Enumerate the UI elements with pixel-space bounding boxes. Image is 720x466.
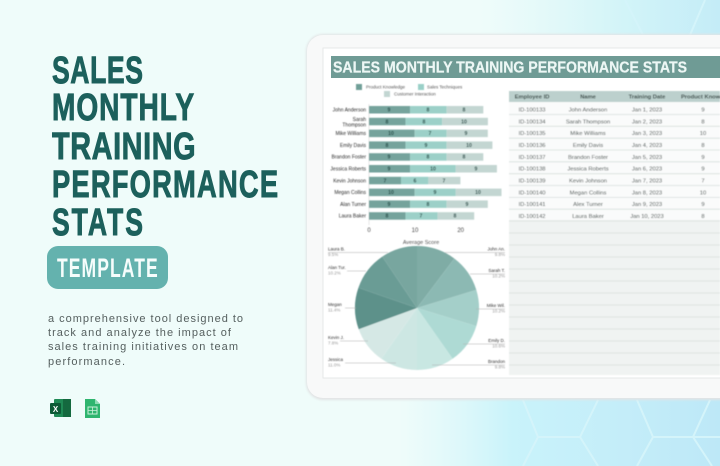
pie labels: Megan	[328, 302, 342, 307]
pie slices	[355, 246, 479, 370]
pie chart	[328, 240, 505, 370]
table rows: ID-100141	[518, 202, 546, 208]
table rows: ID-100142	[518, 214, 546, 220]
title: SALES	[52, 48, 143, 91]
bars: 8	[386, 214, 389, 220]
bars: 10	[388, 190, 394, 196]
pie labels: 9.8%	[495, 364, 505, 370]
bar names: Laura Baker	[339, 214, 366, 220]
bars: 7	[443, 178, 446, 184]
table rows: 9	[701, 155, 705, 161]
bars: 8	[423, 119, 426, 125]
table rows: Jan 7, 2023	[632, 178, 662, 184]
pie title: Average Score	[403, 240, 439, 246]
description	[48, 313, 243, 368]
tablet frame	[306, 34, 720, 400]
pie labels: 9.5%	[328, 252, 338, 257]
pie labels: Brandon	[488, 359, 505, 364]
bar names: Alan Turner	[340, 202, 366, 208]
table rows: ID-100136	[518, 143, 546, 149]
description: sales training initiatives on team	[48, 341, 238, 353]
table rows: Mike Williams	[570, 131, 606, 137]
bars: 7	[384, 178, 387, 184]
bar names: Mike Williams	[335, 131, 366, 137]
table rows: 9	[701, 108, 705, 114]
table rows: Jan 9, 2023	[632, 202, 662, 208]
bar names: Sarah	[353, 117, 366, 123]
table rows: Jan 4, 2023	[632, 143, 662, 149]
bars: 8	[463, 155, 466, 161]
bars: 9	[425, 143, 428, 149]
table rows: Alex Turner	[573, 202, 603, 208]
template badge	[47, 246, 168, 289]
bars: 10	[430, 166, 436, 172]
bar names: Jessica Roberts	[330, 166, 366, 172]
chart legend	[356, 84, 463, 97]
chart legend: Sales Techniques	[427, 84, 463, 90]
bars: 7	[429, 131, 432, 137]
table rows	[509, 102, 720, 365]
title	[52, 48, 278, 243]
pie labels: Emily D.	[488, 338, 505, 343]
bars: 9	[388, 166, 391, 172]
table rows: 8	[701, 119, 705, 125]
table rows: Jan 10, 2023	[630, 214, 664, 220]
table rows: 10	[700, 190, 706, 196]
title: TRAINING	[52, 125, 196, 168]
description: track and analyze the impact of	[48, 327, 232, 339]
pie labels: 7.8%	[328, 340, 338, 346]
bar names: Thompson	[342, 122, 366, 128]
icon: excel: X	[53, 405, 59, 414]
table rows: Emily Davis	[573, 143, 603, 149]
bar names: Kevin Johnson	[333, 178, 366, 184]
description: performance.	[48, 356, 125, 368]
pie labels: 11.4%	[328, 308, 340, 312]
pie labels: John An.	[487, 246, 505, 252]
table rows: Jan 5, 2023	[632, 155, 662, 161]
bars: 8	[463, 108, 466, 114]
bars: 10	[475, 190, 481, 196]
table rows: 9	[701, 167, 705, 173]
table rows: Jan 1, 2023	[632, 108, 662, 114]
table rows: 8	[701, 143, 705, 149]
table rows: ID-100134	[518, 119, 546, 125]
title: PERFORMANCE	[52, 164, 278, 206]
table header: Employee ID	[515, 94, 549, 100]
pie labels: Laura B.	[328, 246, 345, 252]
bar names: Megan Collins	[334, 190, 366, 196]
table rows: Laura Baker	[572, 214, 604, 220]
bar names: John Anderson	[333, 108, 366, 114]
bar names: Emily Davis	[340, 143, 366, 149]
pie labels: 10.2%	[492, 274, 505, 278]
table rows: ID-100135	[518, 131, 546, 137]
table rows: ID-100133	[518, 108, 546, 114]
bar names	[330, 108, 366, 220]
table rows: Jan 2, 2023	[632, 119, 662, 125]
template badge: TEMPLATE	[57, 252, 158, 283]
table rows: 9	[701, 202, 705, 208]
pie labels: Alan Tur.	[328, 265, 346, 270]
table rows: Megan Collins	[570, 190, 606, 196]
table rows: Jan 8, 2023	[632, 190, 662, 196]
icon: excel	[50, 399, 71, 417]
table rows: Jan 3, 2023	[632, 131, 662, 137]
axis: 20	[457, 228, 465, 234]
bars: 10	[466, 143, 472, 149]
pie labels: Jessica	[328, 357, 344, 362]
bars: 7	[420, 214, 423, 220]
pie labels	[328, 246, 505, 370]
bars: 10	[388, 131, 394, 137]
table header: Training Date	[629, 94, 666, 100]
pie labels: 9.8%	[495, 252, 505, 257]
bars: 8	[386, 143, 389, 149]
table rows: Brandon Foster	[568, 155, 608, 161]
bars: 9	[475, 166, 478, 172]
bars: 9	[466, 202, 469, 208]
bars: 8	[427, 155, 430, 161]
bars: 8	[454, 214, 457, 220]
table rows: 8	[701, 214, 705, 220]
table rows: ID-100138	[518, 167, 546, 173]
chart legend: Customer Interaction	[394, 92, 436, 96]
pie labels: 10.2%	[492, 308, 505, 314]
table rows: Jessica Roberts	[567, 167, 609, 173]
icon: google sheets	[85, 399, 100, 418]
table rows: Kevin Johnson	[569, 178, 607, 184]
table header: Name	[580, 94, 597, 100]
title: STATS	[52, 200, 143, 243]
bars: 9	[388, 155, 391, 161]
table rows: ID-100137	[518, 155, 546, 161]
title: MONTHLY	[52, 87, 194, 129]
bars: 6	[414, 178, 417, 184]
description: a comprehensive tool designed to	[48, 313, 243, 325]
axis: 0	[367, 228, 371, 234]
pie labels: 10.6%	[492, 344, 505, 348]
chart legend: Product Knowledge	[366, 84, 406, 90]
bars: 9	[388, 202, 391, 208]
pie labels: Kevin J.	[328, 335, 344, 340]
bar names: Brandon Foster	[332, 155, 366, 161]
bars: 9	[465, 131, 468, 137]
pie labels: 10.2%	[328, 270, 341, 276]
axis: 10	[412, 228, 419, 234]
data table	[509, 91, 720, 375]
stacked bar chart	[330, 84, 502, 234]
pie labels: Mike Wil.	[487, 303, 505, 308]
table rows: 10	[700, 131, 706, 137]
pie labels: Sarah T.	[488, 268, 505, 273]
axis	[367, 228, 465, 234]
pie labels: 11.0%	[328, 362, 340, 368]
bars: 10	[461, 119, 467, 125]
table rows: John Anderson	[569, 108, 607, 114]
table rows: ID-100139	[518, 178, 546, 184]
table rows: Jan 6, 2023	[632, 167, 662, 173]
table rows: ID-100140	[518, 190, 546, 196]
bars	[369, 104, 502, 225]
table rows: Sarah Thompson	[566, 119, 610, 125]
bars: 8	[427, 108, 430, 114]
bars: 9	[388, 108, 391, 114]
bars: 9	[434, 190, 437, 196]
table rows: 7	[701, 178, 705, 184]
bars: 8	[427, 202, 430, 208]
bars: 8	[386, 119, 389, 125]
table header	[509, 91, 720, 102]
